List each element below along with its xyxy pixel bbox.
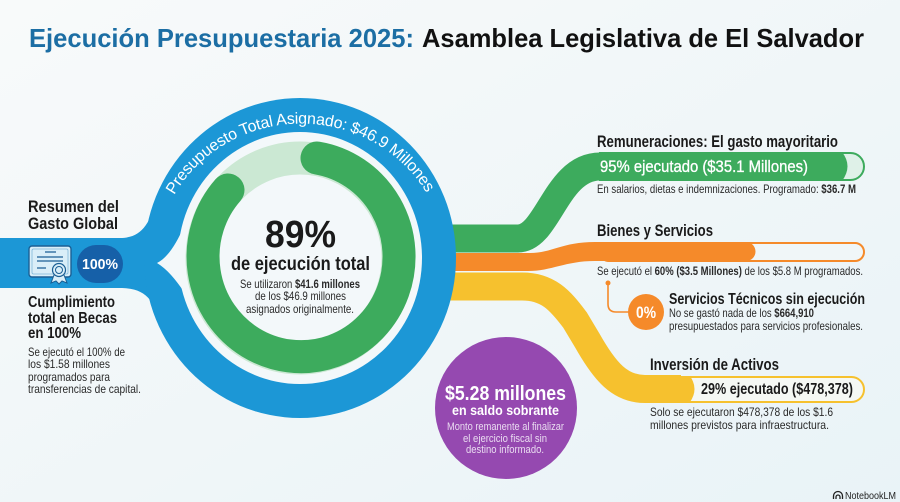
badge: 100%: 100% bbox=[82, 256, 118, 273]
center text: 89% de ejecución total: Se utilizaron $41.6 millones bbox=[240, 277, 360, 291]
center text: 89% de ejecución total: asignados originalmente. bbox=[246, 302, 354, 316]
panel: inversión de activos: 29% ejecutado ($478,378) bbox=[701, 381, 853, 398]
text block: cumplimiento en becas: transferencias de capital. bbox=[28, 382, 141, 396]
callout: saldo sobrante: destino informado. bbox=[466, 444, 544, 456]
blue budget ring with left stem bbox=[0, 98, 456, 418]
panel: inversión de activos bbox=[650, 356, 853, 432]
callout: saldo sobrante: en saldo sobrante bbox=[452, 402, 559, 418]
title bbox=[29, 23, 864, 53]
callout: saldo sobrante: el ejercicio fiscal sin bbox=[463, 433, 547, 445]
text block: cumplimiento en becas bbox=[28, 294, 141, 396]
panel: remuneraciones: Remuneraciones: El gasto mayoritario bbox=[597, 133, 838, 151]
center text: 89% de ejecución total: de ejecución total bbox=[231, 254, 370, 275]
badge: 100% bbox=[77, 245, 123, 283]
heading: resumen del gasto global bbox=[28, 198, 119, 233]
icon: certificate bbox=[29, 246, 71, 284]
callout: saldo sobrante bbox=[435, 337, 577, 479]
donut chart: 89% executed bbox=[202, 158, 399, 358]
badge: 0% bbox=[628, 294, 664, 330]
panel: inversión de activos: millones previstos para infraestructura. bbox=[650, 418, 829, 432]
orange flow connector and progress bar bbox=[440, 242, 864, 271]
callout: saldo sobrante: $5.28 millones bbox=[445, 382, 566, 405]
panel: inversión de activos: Solo se ejecutaron $478,378 de los $1.6 bbox=[650, 405, 833, 419]
panel: bienes y servicios: Bienes y Servicios bbox=[597, 222, 713, 240]
callout: servicios técnicos: No se gastó nada de los $664,910 bbox=[669, 306, 814, 320]
text block: cumplimiento en becas: los $1.58 millones bbox=[28, 357, 110, 371]
callout: servicios técnicos bbox=[669, 291, 865, 333]
title: Asamblea Legislativa de El Salvador bbox=[422, 23, 864, 53]
center text: 89% de ejecución total bbox=[231, 214, 370, 316]
panel: inversión de activos: Inversión de Activos bbox=[650, 356, 779, 374]
text block: cumplimiento en becas: programados para bbox=[28, 370, 110, 384]
panel: remuneraciones bbox=[597, 133, 856, 196]
text block: cumplimiento en becas: Se ejecutó el 100% de bbox=[28, 345, 125, 359]
yellow flow connector and progress bar bbox=[440, 286, 864, 402]
arc label: total budget: Presupuesto Total Asignado: $46.9 Millones bbox=[166, 112, 432, 194]
heading: resumen del gasto global: Gasto Global bbox=[28, 215, 118, 233]
callout: saldo sobrante: Monto remanente al finalizar bbox=[447, 421, 564, 433]
center text: 89% de ejecución total: de los $46.9 millones bbox=[255, 289, 346, 303]
badge: 0%: 0% bbox=[636, 303, 656, 322]
heading: resumen del gasto global: Resumen del bbox=[28, 198, 119, 216]
text block: cumplimiento en becas: Cumplimiento bbox=[28, 294, 115, 311]
text block: cumplimiento en becas: en 100% bbox=[28, 325, 81, 342]
panel: bienes y servicios bbox=[597, 222, 863, 278]
panel: bienes y servicios: Se ejecutó el 60% ($3.5 Millones) de los $5.8 M programados. bbox=[597, 264, 863, 278]
green flow connector and progress bar bbox=[440, 152, 864, 238]
panel: remuneraciones: 95% ejecutado ($35.1 Millones) bbox=[600, 157, 808, 176]
arrow: callout connector bbox=[606, 280, 632, 312]
panel: remuneraciones: En salarios, dietas e indemnizaciones. Programado: $36.7 M bbox=[597, 182, 856, 196]
title: Ejecución Presupuestaria 2025: bbox=[29, 23, 414, 53]
text block: cumplimiento en becas: total en Becas bbox=[28, 310, 117, 327]
center text: 89% de ejecución total: 89% bbox=[265, 214, 336, 256]
